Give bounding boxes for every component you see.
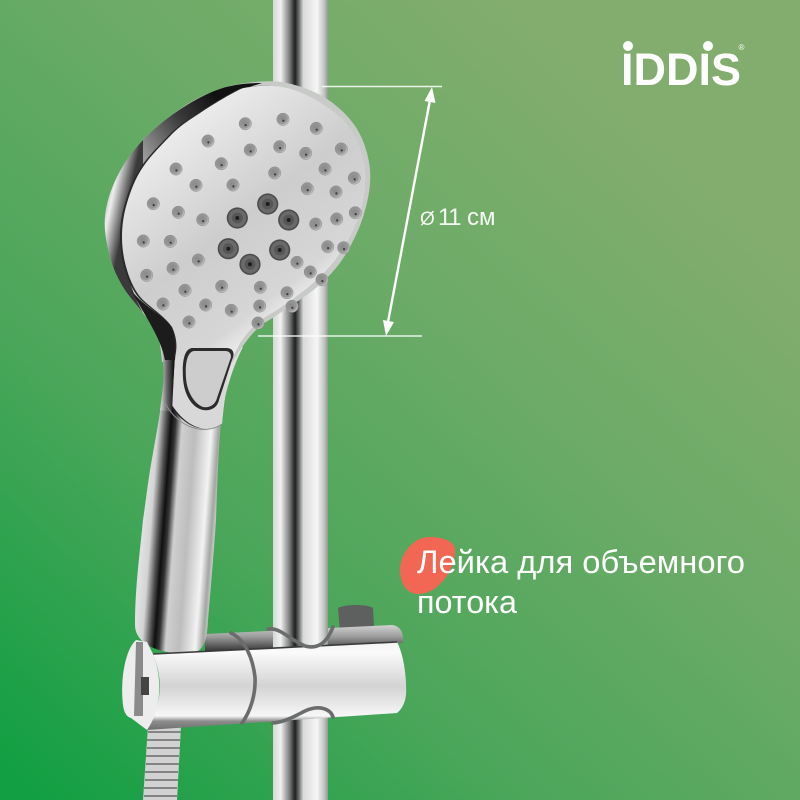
small nozzles (137, 113, 361, 329)
caption: потока (417, 584, 517, 620)
shower rail (273, 0, 328, 800)
clamp knob (338, 605, 374, 635)
rim left shading (105, 140, 150, 313)
clamp back section (205, 605, 403, 655)
face shadow edge (120, 86, 363, 429)
mode button (183, 348, 234, 410)
dimension lines (258, 86, 442, 336)
head rim (105, 81, 370, 362)
handle collar line (165, 403, 222, 429)
head lower-left shadow crescent (130, 288, 175, 360)
rim dark top crescent (143, 83, 262, 167)
coral accent blob (400, 537, 455, 594)
clamp body (147, 642, 406, 730)
large centre nozzles (218, 193, 299, 275)
handle collar tone (172, 357, 233, 429)
logo: IDDIS (621, 44, 741, 95)
rail clamp body (122, 627, 406, 730)
handle (135, 347, 243, 654)
diameter label: Ø (420, 209, 435, 230)
diameter label: 11 (438, 204, 461, 231)
diameter label: см (467, 204, 496, 231)
clamp top edge (153, 642, 397, 654)
caption (417, 544, 745, 620)
diameter arrow (383, 87, 436, 336)
clamp straps (231, 627, 333, 723)
logo: ® (738, 43, 744, 52)
neck dark band (158, 327, 175, 412)
flexible hose (143, 726, 181, 800)
head face (122, 86, 365, 429)
hand shower (105, 81, 370, 654)
clamp end cap (122, 640, 159, 730)
caption: Лейка для объемного (417, 544, 745, 580)
